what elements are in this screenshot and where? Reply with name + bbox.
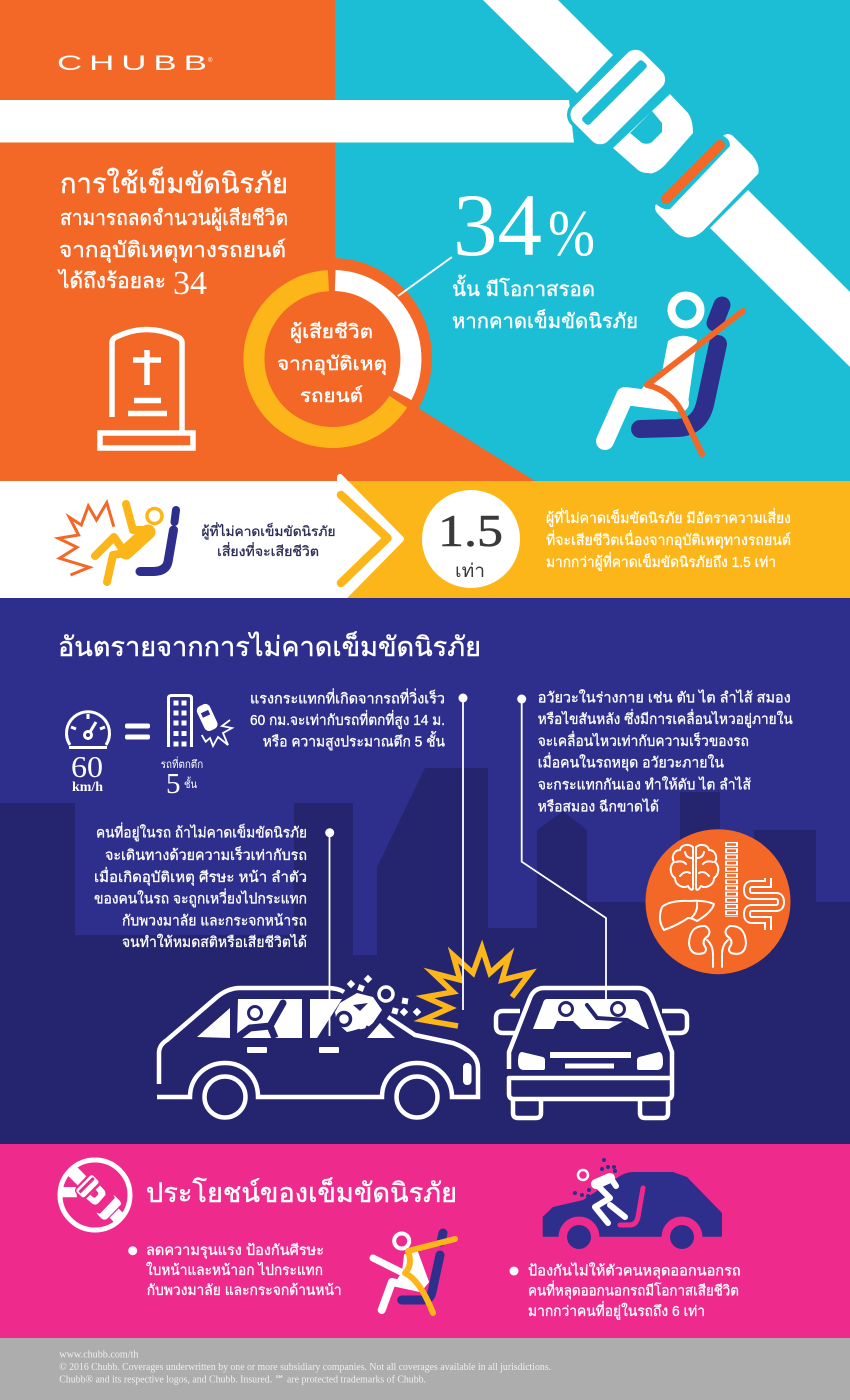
callout line: impact force — [458, 694, 468, 1010]
icon: car falling from building: ชั้น — [184, 776, 197, 791]
icon: organs circle — [646, 829, 790, 974]
heading: dangers: อันตรายจากการไม่คาดเข็มขัดนิรภัย — [58, 629, 481, 662]
arrow: white chevron — [340, 477, 401, 601]
icon: speedometer 60 km/h: 60 — [71, 749, 103, 784]
text: impact force: 60 กม.จะเท่ากับรถที่ตกที่สูง 14 ม. — [250, 710, 445, 729]
chart: donut 34 percent: จากอุบัติเหตุ — [277, 354, 387, 376]
bullet: prevent ejection: คนที่หลุดออกนอกรถมีโอกาสเสียชีวิต — [528, 1281, 739, 1300]
text: risk explanation: ที่จะเสียชีวิตเนื่องจากอุบัติเหตุทางรถยนต์ — [546, 530, 791, 549]
seat belt illustration — [0, 0, 850, 367]
text: impact force: แรงกระแทกที่เกิดจากรถที่วิ่งเร็ว — [250, 688, 445, 707]
logo: Chubb: CHUBB — [57, 52, 214, 75]
text: internal organs: เมื่อคนในรถหยุด อวัยวะภายใน — [538, 753, 724, 772]
icon: tombstone — [100, 330, 193, 448]
callout line: organs — [517, 694, 606, 1000]
text: risk explanation: มากกว่าผู้ที่คาดเข็มขัดนิรภัยถึง 1.5 เท่า — [546, 552, 776, 571]
bullet: prevent ejection — [510, 1262, 741, 1320]
illustration: front car — [496, 988, 687, 1118]
callout: 34 percent: หากคาดเข็มขัดนิรภัย — [452, 308, 638, 333]
icon: car falling from building: 5 — [166, 768, 180, 800]
icon: ejected passenger car — [543, 1158, 722, 1258]
heading: seat belt use: 34 — [173, 265, 207, 302]
text: internal organs: หรือไขสันหลัง ซึ่งมีการเคลื่อนไหวอยู่ภายใน — [538, 709, 793, 728]
skyline background — [0, 768, 850, 1144]
icon: braced passenger — [373, 1233, 455, 1313]
chart: donut 34 percent: ผู้เสียชีวิต — [290, 321, 373, 343]
stat: 1.5 times: 1.5 — [438, 505, 503, 556]
bullet: prevent ejection: ป้องกันไม่ให้ตัวคนหลุดออกนอกรถ — [528, 1262, 741, 1280]
text: internal organs: หรือสมอง ฉีกขาดได้ — [538, 797, 659, 815]
heading: seat belt use: การใช้เข็มขัดนิรภัย — [60, 166, 288, 199]
icon: belt badge — [58, 1158, 132, 1232]
icon: collision burst — [423, 948, 530, 1026]
icon: speedometer 60 km/h: km/h — [72, 780, 103, 795]
icon: speedometer 60 km/h — [66, 712, 110, 795]
text: risk explanation — [546, 508, 791, 571]
text: internal organs — [538, 688, 793, 815]
panel: footer: © 2016 Chubb. Coverages underwritten by one or more subsidiary companies. Not all coverages available in all jurisdictions. — [59, 1362, 551, 1373]
icon: car falling from building — [161, 696, 232, 800]
chart: donut 34 percent — [254, 281, 411, 437]
panel: dangers — [0, 598, 850, 1144]
text: occupant motion: ของคนในรถ จะถูกเหวี่ยงไปกระแทก — [94, 888, 307, 908]
text: unbelted risk — [202, 522, 336, 559]
callout: 34 percent — [398, 177, 638, 333]
bullet: reduce severity — [128, 1242, 342, 1299]
callout: 34 percent: % — [548, 197, 595, 270]
text: impact force: หรือ ความสูงประมาณตึก 5 ชั้น — [263, 731, 445, 751]
icon: belted passenger — [605, 296, 743, 454]
stat: 1.5 times — [422, 490, 520, 588]
text: occupant motion: จนทำให้หมดสติหรือเสียชีวิตได้ — [122, 933, 307, 951]
icon: car falling from building: รถที่ตกตึก — [161, 756, 203, 771]
text: occupant motion: เมื่อเกิดอุบัติเหตุ ศีรษะ หน้า ลำตัว — [94, 867, 307, 886]
text: internal organs: จะกระแทกกันเอง ทำให้ตับ ไต ลำไส้ — [538, 775, 751, 793]
heading: seat belt use: สามารถลดจำนวนผู้เสียชีวิต — [60, 207, 288, 231]
panel: risk band — [0, 477, 850, 610]
text: occupant motion: คนที่อยู่ในรถ ถ้าไม่คาดเข็มขัดนิรภัย — [96, 823, 307, 842]
panel: footer: Chubb® and its respective logos, and Chubb. Insured. ℠ are protected trademarks of Chubb. — [59, 1374, 426, 1385]
panel: footer: www.chubb.com/th — [59, 1350, 138, 1361]
illustration: side car — [157, 975, 478, 1118]
callout: 34 percent: นั้น มีโอกาสรอด — [452, 275, 595, 301]
panel: footer — [0, 1338, 850, 1400]
text: occupant motion: จะเดินทางด้วยความเร็วเท่ากับรถ — [105, 845, 307, 864]
text: impact force — [250, 688, 445, 751]
heading: seat belt use: จากอุบัติเหตุทางรถยนต์ — [59, 238, 286, 263]
heading: seat belt use — [57, 166, 288, 302]
text: unbelted risk: เสี่ยงที่จะเสียชีวิต — [217, 542, 319, 559]
text: internal organs: อวัยวะในร่างกาย เช่น ตับ ไต ลำไส้ สมอง — [538, 688, 791, 706]
bullet: reduce severity: ใบหน้าและหน้าอก ไปกระแทก — [146, 1261, 323, 1279]
icon: unbelted crash — [58, 503, 176, 582]
heading: seat belt use: ได้ถึงร้อยละ — [57, 269, 166, 293]
text: occupant motion — [94, 823, 307, 951]
text: risk explanation: ผู้ที่ไม่คาดเข็มขัดนิรภัย มีอัตราความเสี่ยง — [546, 508, 791, 527]
bullet: reduce severity: กับพวงมาลัย และกระจกด้านหน้า — [147, 1282, 342, 1299]
logo: Chubb: ® — [208, 57, 213, 64]
panel: top hero — [0, 0, 850, 481]
panel: benefits — [0, 1144, 850, 1338]
bullet: prevent ejection: มากกว่าคนที่อยู่ในรถถึง 6 เท่า — [528, 1301, 705, 1320]
chart: donut 34 percent: รถยนต์ — [300, 385, 363, 407]
stat: 1.5 times: เท่า — [455, 561, 485, 582]
callout: 34 percent: 34 — [453, 177, 542, 275]
heading: benefits: ประโยชน์ของเข็มขัดนิรภัย — [146, 1175, 457, 1208]
icon: equals — [125, 724, 150, 740]
text: internal organs: จะเคลื่อนไหวเท่ากับความเร็วของรถ — [538, 731, 749, 750]
callout line: occupant — [325, 828, 334, 1036]
text: unbelted risk: ผู้ที่ไม่คาดเข็มขัดนิรภัย — [202, 522, 336, 540]
bullet: reduce severity: ลดความรุนแรง ป้องกันศีรษะ — [146, 1242, 324, 1259]
text: occupant motion: กับพวงมาลัย และกระจกหน้ารถ — [122, 913, 307, 930]
